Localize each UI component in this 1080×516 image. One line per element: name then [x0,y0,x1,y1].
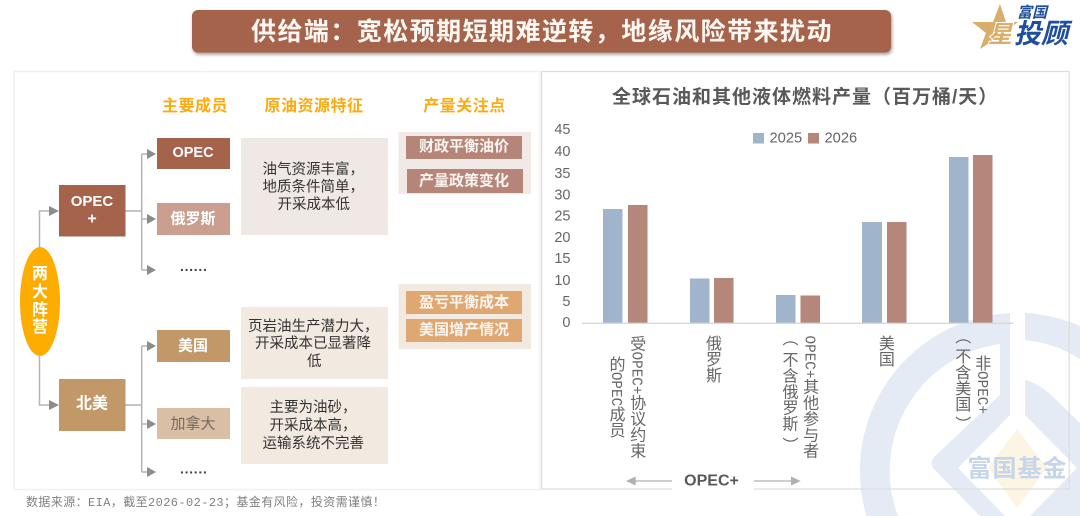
box: Canada: 加拿大 [170,414,216,432]
feature: US shale: 开采成本已显著降 [255,335,371,352]
panel: camps and members [14,72,540,490]
logo: Fullgoal star advisor: 富国 [1017,4,1049,22]
feature: Canada oil sands: 主要为油砂， [270,399,356,416]
logo: Fullgoal star advisor: 投顾 [1014,19,1073,49]
focus group: OPEC+: 产量政策变化 [419,172,509,190]
category labels: 的 OPEC 成员 [606,356,626,438]
legend [753,130,857,146]
ellipsis: other North American members: ...... [180,460,208,476]
heading: production focus: 产量关注点 [423,96,506,115]
category labels: 非 OPEC+ [972,355,991,414]
focus group: North America: 盈亏平衡成本 [419,293,509,311]
category labels: 俄罗斯 [703,335,722,384]
oval: two camps: 大 [32,283,48,301]
watermark: Fullgoal fund emblem [860,313,1080,516]
category labels: （ [780,330,796,346]
y axis labels: 35 [554,166,570,182]
y axis labels: 25 [554,208,570,224]
oval: two camps: 两 [32,266,48,282]
category labels [606,328,991,459]
box: North America: 北美 [76,394,108,412]
box: OPEC+: + [87,210,97,228]
y axis labels: 0 [562,315,570,331]
box: OPEC [157,138,230,169]
box: Russia: 俄罗斯 [170,210,216,228]
box: OPEC+ [59,185,126,236]
chart title: 全球石油和其他液体燃料产量（百万桶/天） [612,85,998,108]
feature: US shale: 低 [307,353,322,370]
feature: OPEC+ resources: 地质条件简单， [262,178,364,196]
OPEC+ range bracket with arrows [626,472,801,492]
category labels: ） [780,437,798,453]
category labels: 不含美国 [952,348,971,412]
box: Russia [157,203,230,235]
focus group: OPEC+: 财政平衡油价 [419,137,509,155]
y axis labels: 30 [554,188,570,204]
box: USA: 美国 [178,336,208,354]
bar chart [582,155,1014,323]
oval: two camps: 营 [32,318,48,336]
panel: global production chart [542,72,1069,492]
y axis labels: 10 [554,273,570,289]
ellipsis: other OPEC+ members: ...... [180,258,208,274]
category labels: 不含俄罗斯 [780,352,798,433]
focus group: North America [398,284,531,349]
title banner [192,10,891,52]
box: OPEC: OPEC [172,145,214,161]
connectors from OPEC+ to members [125,149,156,275]
source note: 数据来源：EIA，截至2026-02-23；基金有风险，投资需谨慎！ [26,494,385,510]
box: Canada [157,408,230,439]
connectors from North America to members [125,341,156,477]
y axis labels: 40 [554,144,570,160]
box: USA [157,330,230,362]
oval: two camps [20,247,60,356]
watermark: Fullgoal fund emblem: 富国基金 [968,454,1068,482]
y axis labels: 5 [562,294,570,310]
OPEC+ range bracket with arrows: OPEC+ [684,472,739,490]
feature: Canada oil sands: 运输系统不完善 [262,435,364,452]
feature: Canada oil sands: 开采成本高， [270,417,356,434]
logo: Fullgoal star advisor: 星 [988,22,1014,48]
feature: US shale [241,307,388,379]
logo: Fullgoal star advisor [972,4,1073,49]
y axis labels: 45 [554,122,570,138]
connectors from camps to groups [40,206,59,410]
y axis labels [554,122,570,331]
box: North America [59,379,126,431]
box: OPEC+: OPEC [71,193,113,210]
category labels: （ [952,328,969,344]
feature: US shale: 页岩油生产潜力大， [248,318,378,335]
feature: OPEC+ resources: 油气资源丰富， [262,160,364,178]
feature: OPEC+ resources: 开采成本低 [278,196,350,213]
oval: two camps: 阵 [32,301,48,319]
title banner: 供给端：宽松预期短期难逆转，地缘风险带来扰动 [251,18,833,46]
category labels: ） [952,416,971,432]
focus group: North America: 美国增产情况 [419,320,509,338]
heading: crude resource features: 原油资源特征 [264,96,364,115]
focus group: OPEC+ [398,132,531,194]
category labels: 美国 [876,335,895,367]
heading: main members: 主要成员 [162,96,228,115]
feature: OPEC+ resources [241,138,388,235]
y axis labels: 20 [554,230,570,246]
legend: 2025 [770,130,802,146]
legend: 2026 [824,130,857,146]
category labels: 受 OPEC+ 协议约束 [627,336,646,459]
feature: Canada oil sands [241,387,388,464]
category labels: OPEC+ 其他参与者 [800,336,819,459]
y axis labels: 15 [554,251,570,267]
